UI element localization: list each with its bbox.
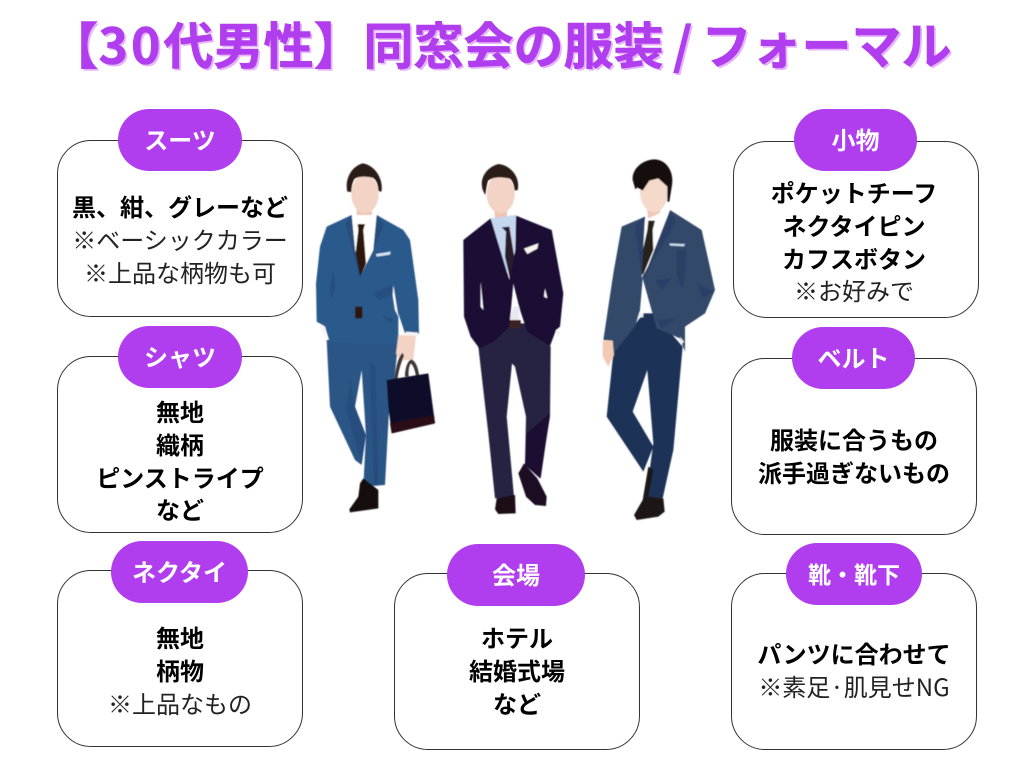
pill: 会場: 会場 (492, 556, 540, 591)
text: ベルト details (758, 421, 950, 489)
text: ベルト details: 派手過ぎないもの (758, 454, 950, 489)
text: ネクタイ details (108, 619, 252, 720)
text: 会場 details: 結婚式場 (469, 652, 565, 687)
text: 靴・靴下 details: ※素足·肌見せNG (758, 668, 950, 703)
text: スーツ details (72, 188, 288, 289)
pill: シャツ (118, 326, 242, 388)
text: ネクタイ details: ※上品なもの (108, 685, 252, 720)
text: スーツ details: ※上品な柄物も可 (84, 254, 276, 289)
figure: man in blue suit with bag (316, 163, 435, 512)
text: 小物 details: ポケットチーフ (771, 174, 937, 209)
text: 会場 details (469, 619, 565, 720)
text: シャツ details: など (156, 491, 204, 526)
pill: 小物 (794, 109, 917, 171)
figure: man in dark navy suit (463, 164, 563, 514)
pill: ネクタイ: ネクタイ (132, 553, 227, 588)
panel: ベルト (731, 327, 977, 535)
pill: 靴・靴下 (786, 543, 922, 605)
title: 【30代男性】同窓会の服装 / フォーマル (48, 7, 952, 79)
text: 靴・靴下 details (757, 635, 951, 703)
text: ネクタイ details: 無地 (156, 619, 204, 654)
text: スーツ details: ※ベーシックカラー (72, 221, 288, 256)
text: 靴・靴下 details: パンツに合わせて (757, 635, 951, 670)
pill: シャツ: シャツ (144, 338, 216, 373)
pill: ベルト (792, 327, 915, 389)
text: シャツ details: 織柄 (156, 426, 204, 461)
pill: 会場 (447, 544, 585, 606)
pill: 靴・靴下: 靴・靴下 (808, 556, 900, 590)
panel: 小物 (733, 109, 979, 318)
panel: シャツ (57, 326, 303, 533)
text: 小物 details (771, 174, 937, 307)
text: シャツ details: ピンストライプ (96, 459, 264, 494)
panel: 会場 (394, 544, 640, 750)
text: シャツ details (96, 393, 264, 526)
text: 会場 details: ホテル (481, 619, 553, 654)
text: シャツ details: 無地 (156, 393, 204, 428)
panel: スーツ (57, 109, 303, 317)
text: スーツ details: 黒、紺、グレーなど (72, 188, 288, 223)
text: 会場 details: など (493, 685, 541, 720)
text: 小物 details: カフスボタン (782, 240, 926, 275)
panel: 靴・靴下 (731, 543, 977, 750)
pill: 小物: 小物 (832, 121, 880, 156)
pill: スーツ: スーツ (144, 121, 216, 156)
text: ネクタイ details: 柄物 (156, 652, 204, 687)
text: 小物 details: ※お好みで (794, 272, 914, 307)
pill: ベルト: ベルト (818, 339, 890, 374)
panel: ネクタイ (57, 541, 303, 747)
text: 小物 details: ネクタイピン (782, 207, 926, 242)
figure: man in slate suit with black hair (603, 159, 715, 520)
pill: スーツ (118, 109, 242, 171)
pill: ネクタイ (111, 541, 248, 603)
text: ベルト details: 服装に合うもの (770, 421, 938, 456)
